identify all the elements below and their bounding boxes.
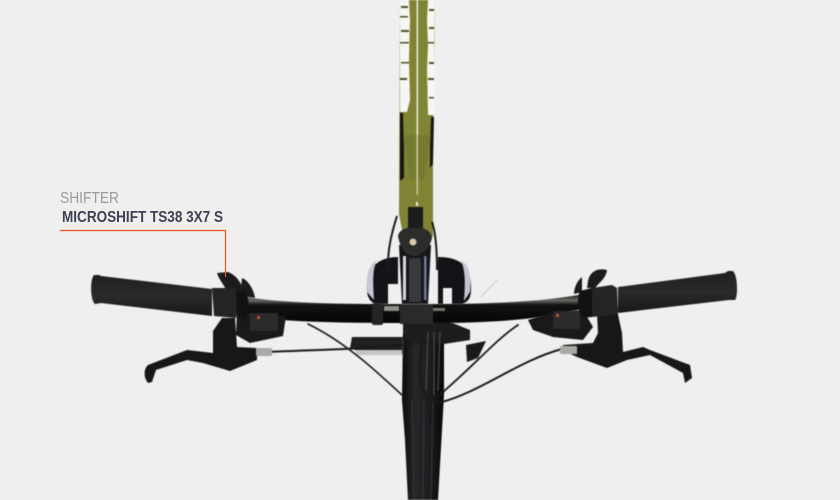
right grip [618,271,737,313]
left shifter pod [236,312,286,343]
frame lettering marks [400,0,410,112]
handlebar [237,294,585,325]
left clamp [212,288,238,318]
leader line [60,230,226,277]
left shifter paddles [217,272,243,292]
stem cap [398,227,432,256]
left grip and controls [91,272,286,383]
right shifter pod [528,310,593,340]
right grip and controls [528,269,737,383]
right shifter paddles [587,269,607,288]
left grip [91,275,212,316]
right brake lever [562,310,692,383]
right clamp [590,285,618,317]
label model: MICROSHIFT TS38 3X7 S [62,209,223,226]
left brake lever [145,318,257,383]
fork and stem [367,202,471,304]
front tyre [402,335,444,500]
label category: SHIFTER [60,190,119,207]
cables and brake hardware [262,280,562,402]
bike frame top tube [399,0,435,240]
callout: shifter label [60,190,226,277]
